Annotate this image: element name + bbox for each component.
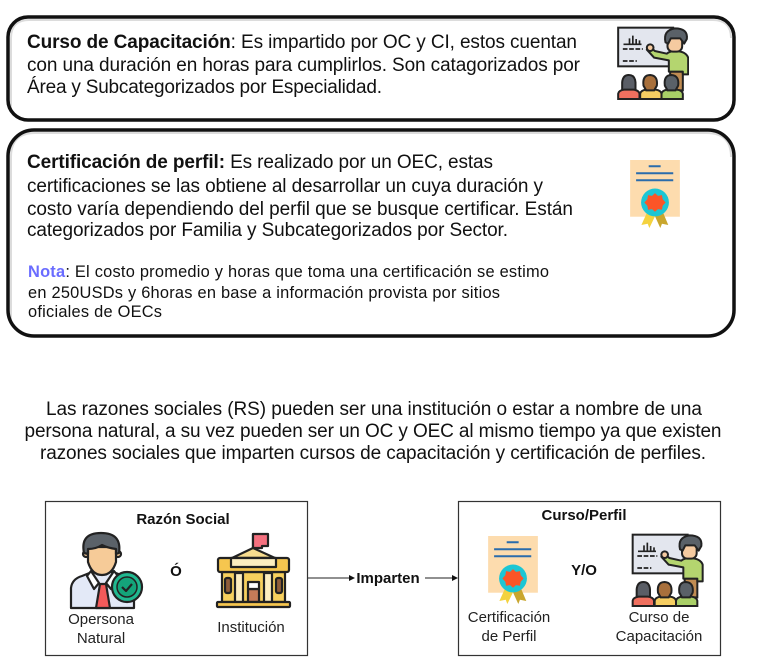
note line: en 250USDs y 6horas en base a información provista por sitios bbox=[28, 284, 500, 302]
label: institución: Institución bbox=[217, 619, 285, 636]
icon: institution building bbox=[217, 534, 290, 607]
panel: razón social bbox=[46, 502, 308, 656]
arrow: imparten: Imparten bbox=[356, 570, 420, 587]
panel: certificación de perfil bbox=[8, 130, 734, 336]
text line: certificaciones se las obtiene al desarrollar un cuya duración y bbox=[27, 176, 544, 197]
paragraph: razones sociales bbox=[24, 399, 722, 464]
icon: certificate bbox=[630, 160, 680, 228]
heading: razón social: Razón Social bbox=[136, 511, 230, 528]
text: ó: Ó bbox=[170, 562, 182, 580]
label: certificación de perfil bbox=[468, 609, 550, 645]
label: certificación de perfil: Certificación bbox=[468, 609, 550, 626]
label: curso de capacitación: Curso de bbox=[629, 609, 689, 626]
heading text: curso de capacitación: Curso de Capacitación: Es impartido por OC y CI, estos cuentan bbox=[27, 32, 577, 53]
text line: Área y Subcategorizados por Especialidad. bbox=[27, 77, 382, 98]
arrow: imparten bbox=[308, 570, 458, 587]
text line: costo varía dependiendo del perfil que se busque certificar. Están bbox=[27, 199, 573, 220]
icon: teacher bbox=[633, 535, 703, 606]
paragraph: razones sociales: Las razones sociales (RS) pueden ser una institución o estar a nombre de una bbox=[46, 399, 702, 420]
icon: teacher bbox=[618, 28, 688, 99]
paragraph: razones sociales: razones sociales que imparten cursos de capacitación y certificación de perfiles. bbox=[40, 443, 706, 464]
icon: person with check badge bbox=[71, 533, 142, 608]
text line: categorizados por Familia y Subcategorizados por Sector. bbox=[27, 220, 508, 241]
text: y/o: Y/O bbox=[571, 562, 597, 579]
panel: curso/perfil bbox=[458, 502, 720, 656]
label: curso de capacitación bbox=[616, 609, 702, 645]
icon: certificate bbox=[488, 536, 538, 604]
label: opersona natural: Natural bbox=[77, 630, 125, 647]
heading: curso/perfil: Curso/Perfil bbox=[541, 507, 627, 524]
panel: curso de capacitación bbox=[8, 17, 734, 120]
label: opersona natural: Opersona bbox=[68, 611, 135, 628]
label: opersona natural bbox=[68, 611, 135, 647]
heading text: certificación de perfil: Certificación de perfil: Es realizado por un OEC, estas bbox=[27, 152, 493, 173]
note line: oficiales de OECs bbox=[28, 303, 162, 321]
paragraph: razones sociales: persona natural, a su vez pueden ser un OC y OEC al mismo tiempo ya que existen bbox=[24, 421, 722, 442]
label: curso de capacitación: Capacitación bbox=[616, 628, 702, 645]
note: Nota: El costo promedio y horas que toma una certificación se estimo bbox=[28, 263, 549, 281]
text line: con una duración en horas para cumplirlos. Son catagorizados por bbox=[27, 55, 581, 76]
label: certificación de perfil: de Perfil bbox=[481, 628, 537, 645]
